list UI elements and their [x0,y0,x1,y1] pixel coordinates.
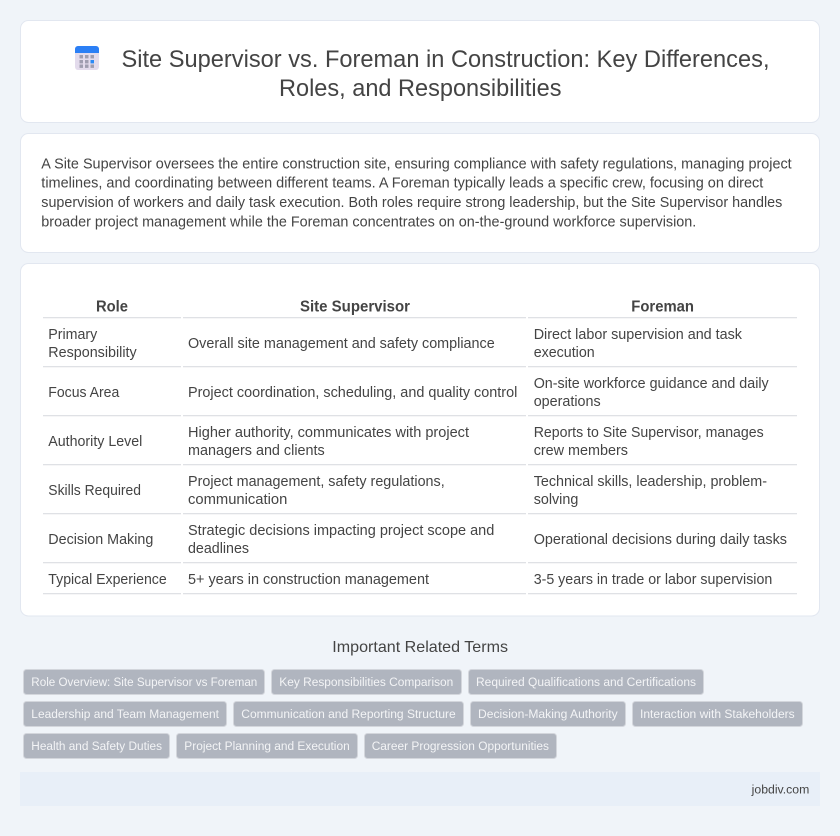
row: primary responsibility: Primary [48,327,98,343]
row: focus area [48,376,769,410]
icon: calendar [75,46,99,70]
panel: introduction paragraph: A Site Supervisor oversees the entire construction site, ensuring compliance with safety regulations, managing project [41,156,792,172]
panel: introduction paragraph: timelines, and coordinating between different teams. A Foreman typically leads a specific crew, focusing on direct [41,176,763,192]
row: decision making: Decision Making [48,532,153,548]
panel: title header [20,20,820,122]
row: decision making: Strategic decisions impacting project scope and [188,523,494,539]
row: decision making: deadlines [188,541,249,557]
row: primary responsibility: execution [534,345,595,361]
panel: introduction paragraph [20,134,820,252]
row: primary responsibility [48,327,743,361]
row: authority level: crew members [534,443,628,459]
row: primary responsibility: Overall site management and safety compliance [188,336,495,352]
row: primary responsibility: Direct labor supervision and task [534,327,743,343]
panel: related term tags: Key Responsibilities Comparison [279,675,453,689]
panel: related term tags: Decision-Making Authority [478,707,619,721]
row: typical experience: Typical Experience [48,572,167,588]
heading: important related terms: Important Related Terms [332,639,508,656]
footer: jobdiv.com [751,782,809,796]
row: skills required: Technical skills, leadership, problem- [534,474,767,490]
row: typical experience [48,572,772,588]
panel: related term tags: Communication and Reporting Structure [241,707,456,721]
row: skills required: Project management, safety regulations, [188,474,445,490]
row: skills required: communication [188,492,287,508]
panel: related term tags: Leadership and Team Management [31,707,220,721]
row: skills required: solving [534,492,578,508]
title: Roles, and Responsibilities [279,75,562,102]
row: authority level: Reports to Site Supervisor, manages [534,425,764,441]
table header row: Role [96,299,128,316]
row: typical experience: 5+ years in construction management [188,572,429,588]
panel: related term tags: Role Overview: Site Supervisor vs Foreman [31,675,257,689]
row: focus area: Project coordination, scheduling, and quality control [188,385,517,401]
table header row [96,299,694,316]
panel: related term tags: Health and Safety Duties [31,739,162,753]
row: decision making: Operational decisions during daily tasks [534,532,787,548]
row: skills required: Skills Required [48,483,141,499]
row: skills required [48,474,767,508]
row: authority level: Higher authority, communicates with project [188,425,469,441]
panel: related term tags: Required Qualifications and Certifications [476,675,696,689]
panel: introduction paragraph: broader project management while the Foreman concentrates on on-the-ground workforce supervision. [41,214,696,230]
title [122,46,770,102]
row: typical experience: 3-5 years in trade or labor supervision [534,572,772,588]
panel: comparison table [20,264,820,616]
title: Site Supervisor vs. Foreman in Construction: Key Differences, [122,46,770,73]
row: primary responsibility: Responsibility [48,345,137,361]
row: authority level: Authority Level [48,434,142,450]
row: authority level: managers and clients [188,443,325,459]
panel: related term tags: Career Progression Opportunities [372,739,549,753]
footer [20,772,820,806]
table header row: Foreman [631,299,694,316]
row: focus area: On-site workforce guidance and daily [534,376,769,392]
row: focus area: Focus Area [48,385,119,401]
row: focus area: operations [534,394,601,410]
panel: related term tags: Project Planning and Execution [184,739,350,753]
panel: related term tags: Interaction with Stakeholders [640,707,795,721]
row: authority level [48,425,764,459]
panel: related term tags [24,670,802,758]
row: decision making [48,523,787,557]
table header row: Site Supervisor [300,299,410,316]
panel: introduction paragraph: supervision of workers and daily task execution. Both roles require strong leadership, but the Site Supervisor handles [41,195,782,211]
